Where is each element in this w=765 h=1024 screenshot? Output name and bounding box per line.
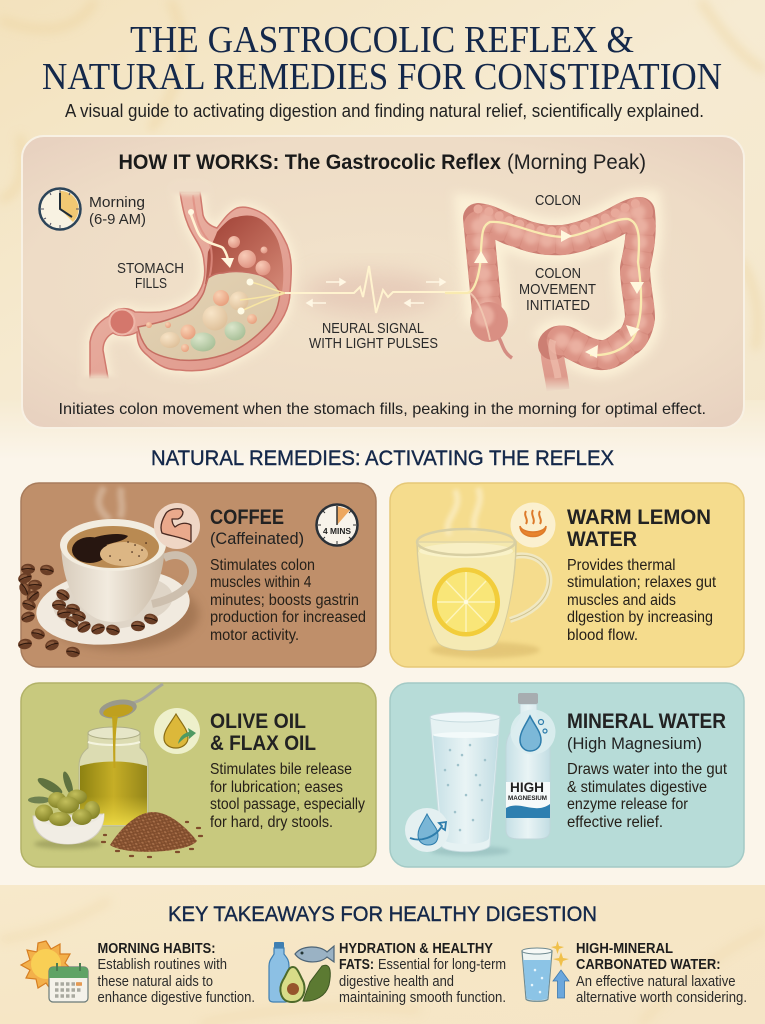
neural signal label (309, 321, 438, 352)
morning label (89, 195, 146, 228)
mineral water text: (High Magnesium) (567, 734, 702, 753)
mineral water text: enzyme release for (567, 796, 688, 813)
stomach fills label (117, 261, 184, 292)
panel heading: HOW IT WORKS: The Gastrocolic Reflex (118, 150, 501, 174)
coffee text: Stimulates colon (210, 557, 315, 574)
takeaway: hydration and healthy fats (339, 941, 506, 1006)
takeaway: high-mineral carbonated water: CARBONATED WATER: (576, 957, 720, 973)
section: key takeaways (0, 885, 765, 1024)
panel: how it works (22, 136, 744, 428)
coffee text: production for increased (210, 609, 366, 626)
neural signal label: NEURAL SIGNAL (322, 321, 424, 337)
bottle label text: MAGNESIUM (508, 795, 547, 802)
lemon text: dlgestion by increasing (567, 609, 713, 626)
takeaway: hydration and healthy fats: HYDRATION & HEALTHY (339, 941, 493, 957)
takeaway: high-mineral carbonated water: alternative worth considering. (576, 990, 747, 1006)
takeaway: hydration and healthy fats: digestive health and (339, 974, 454, 990)
icon: clock (40, 188, 80, 230)
illustration: glass of water (430, 712, 510, 856)
stomach fills label: STOMACH (117, 261, 184, 277)
takeaway: high-mineral carbonated water (576, 941, 747, 1006)
title (42, 19, 722, 98)
coffee text: (Caffeinated) (210, 529, 304, 548)
takeaway: morning habits: Establish routines with (98, 957, 227, 973)
lemon text (567, 506, 717, 644)
illustration: coffee cup (33, 487, 199, 652)
olive oil text: Stimulates bile release (210, 761, 352, 778)
coffee beans (17, 564, 159, 658)
colon labels: MOVEMENT (519, 282, 596, 298)
takeaway: morning habits: these natural aids to (98, 974, 213, 990)
coffee text: muscles within 4 (210, 574, 312, 591)
neural signal label: WITH LIGHT PULSES (309, 336, 438, 352)
card: olive and flax oil (21, 683, 376, 867)
stomach fills label: FILLS (135, 276, 167, 292)
colon labels: COLON (535, 193, 581, 209)
takeaway: hydration and healthy fats: maintaining smooth function. (339, 990, 506, 1006)
olive oil text: for hard, dry stools. (210, 814, 333, 831)
illustration: colon (445, 203, 644, 390)
lemon text: stimulation; relaxes gut (567, 574, 717, 591)
takeaway: high-mineral carbonated water: HIGH-MINERAL (576, 941, 673, 957)
neural signal with arrows (285, 266, 473, 315)
illustration: flax seeds (102, 812, 202, 857)
takeaway: morning habits (98, 941, 255, 1006)
bottle label text: HIGH (510, 779, 544, 795)
panel heading: (Morning Peak) (507, 150, 646, 174)
card: mineral water (390, 683, 744, 867)
colon labels: COLON (535, 266, 581, 282)
icon: 4 minute timer (316, 504, 358, 546)
morning label: (6-9 AM) (89, 212, 146, 228)
colon labels: INITIATED (526, 298, 590, 314)
icon: oil drop (154, 708, 200, 754)
illustration: olives bowl (28, 771, 104, 849)
illustration: stomach (77, 181, 291, 393)
icon: sun and calendar (21, 941, 88, 1002)
olive oil text (210, 710, 365, 831)
icon: 4 minute timer: 4 MINS (323, 527, 352, 536)
bottle label text (508, 779, 547, 802)
takeaway: hydration and healthy fats: FATS: (339, 957, 374, 973)
lemon text: Provides thermal (567, 557, 676, 574)
olive oil text: & FLAX OIL (210, 732, 316, 755)
mineral water text: effective relief. (567, 814, 663, 831)
takeaway: morning habits: MORNING HABITS: (98, 941, 216, 957)
illustration: bottle (506, 693, 550, 839)
colon labels (519, 193, 596, 314)
morning label: Morning (89, 195, 145, 211)
lemon text: WARM LEMON (567, 506, 711, 529)
mineral water text: & stimulates digestive (567, 779, 707, 796)
panel caption: Initiates colon movement when the stomach fills, peaking in the morning for optimal effect. (58, 401, 706, 418)
olive oil text: stool passage, especially (210, 796, 365, 813)
title: NATURAL REMEDIES FOR CONSTIPATION (42, 56, 722, 98)
illustration: lemon water mug (417, 488, 549, 658)
icon: warmth (510, 502, 556, 548)
illustration: oil jar and spoon (79, 684, 163, 826)
coffee text: COFFEE (210, 506, 284, 529)
coffee text (210, 506, 366, 644)
mineral water text (567, 710, 728, 831)
card: coffee (17, 483, 376, 667)
card: warm lemon water (390, 483, 744, 667)
subtitle: A visual guide to activating digestion and finding natural relief, scientifically explained. (65, 101, 704, 121)
takeaway: morning habits: enhance digestive function. (98, 990, 255, 1006)
takeaway: hydration and healthy fats: Essential for long-term (378, 957, 506, 973)
lemon text: muscles and aids (567, 592, 676, 609)
section heading: natural remedies: NATURAL REMEDIES: ACTIVATING THE REFLEX (151, 446, 614, 470)
icon: muscle (154, 503, 200, 549)
icon: drop with flow (405, 808, 449, 852)
coffee text: motor activity. (210, 627, 299, 644)
icon: bottle, fish, avocado (269, 942, 334, 1002)
coffee text: minutes; boosts gastrin (210, 592, 359, 609)
lemon text: WATER (567, 528, 637, 551)
key takeaways heading: KEY TAKEAWAYS FOR HEALTHY DIGESTION (168, 902, 597, 926)
icon: carbonated glass (522, 941, 569, 1001)
icon: water drop (510, 710, 556, 754)
title: THE GASTROCOLIC REFLEX & (130, 19, 634, 61)
olive oil text: for lubrication; eases (210, 779, 343, 796)
takeaway: high-mineral carbonated water: An effective natural laxative (576, 974, 736, 990)
lemon text: blood flow. (567, 627, 638, 644)
mineral water text: MINERAL WATER (567, 710, 726, 733)
olive oil text: OLIVE OIL (210, 710, 306, 733)
mineral water text: Draws water into the gut (567, 761, 728, 778)
